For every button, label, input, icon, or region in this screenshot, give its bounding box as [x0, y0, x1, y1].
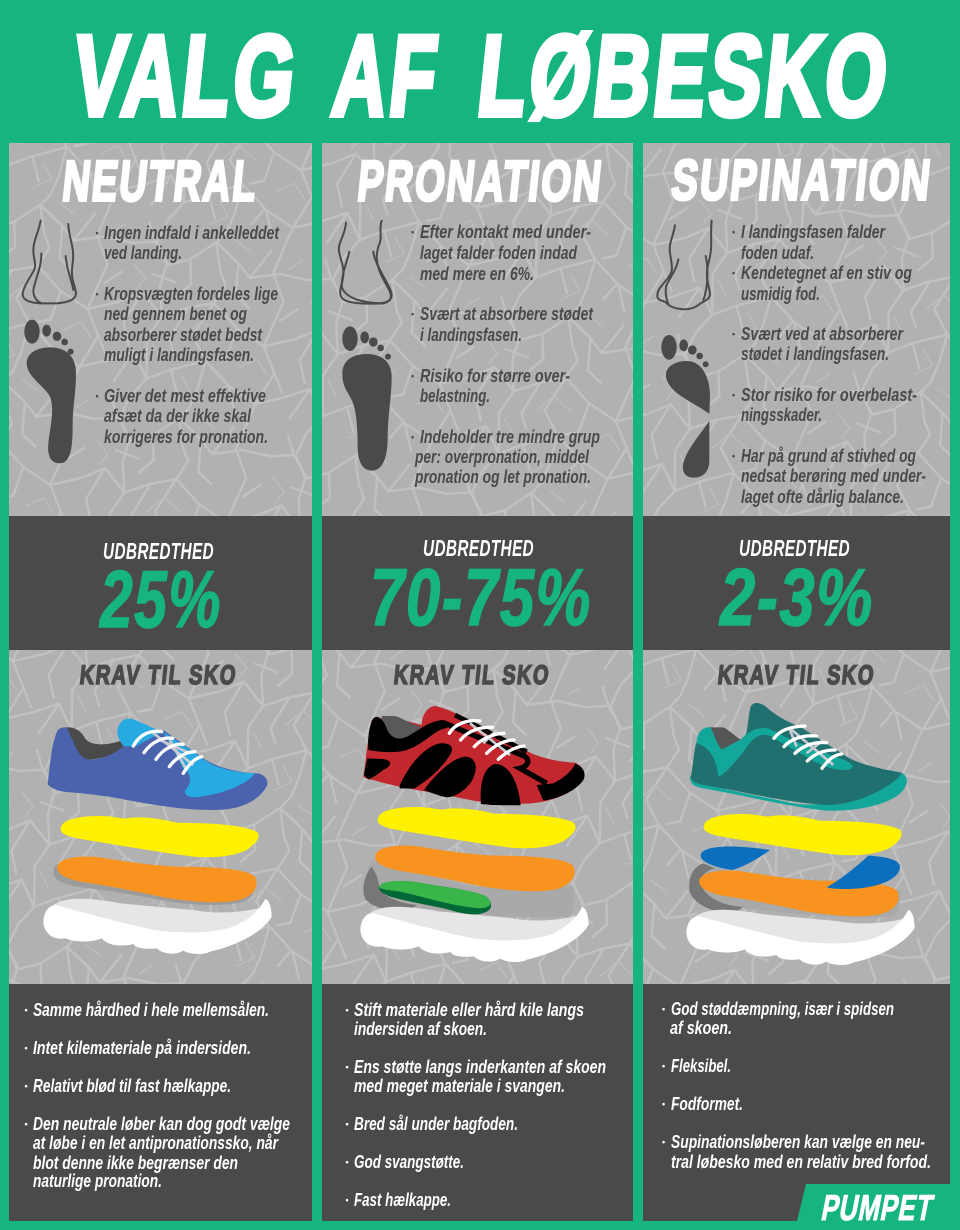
pronation insole layer: [378, 807, 576, 848]
supination description: •: [732, 329, 735, 339]
supination description: usmidig fod.: [741, 284, 820, 304]
pronation description: pronation og let pronation.: [414, 467, 591, 487]
title: AF: [327, 13, 446, 140]
neutral shoe heading: KRAV TIL SKO: [78, 659, 239, 690]
neutral description: afsæt da der ikke skal: [104, 406, 252, 426]
pronation shoe requirements: Stift materiale eller hård kile langs: [354, 1000, 584, 1020]
neutral shoe requirements: •: [24, 1081, 28, 1091]
neutral shoe panel background: [9, 650, 312, 984]
supination shoe requirements: Fodformet.: [671, 1094, 743, 1114]
pronation shoe requirements: •: [346, 1119, 349, 1129]
pronation shoe requirements: God svangstøtte.: [354, 1152, 464, 1172]
supination prevalence band: UDBREDTHED: [739, 535, 850, 561]
supination description: Kendetegnet af en stiv og: [741, 263, 912, 283]
supination description: •: [732, 390, 735, 400]
supination description: Stor risiko for overbelast-: [741, 385, 917, 405]
pronation description: belastning.: [420, 386, 490, 406]
neutral description: Kropsvægten fordeles lige: [104, 284, 278, 304]
icon: pronation footprint: [342, 326, 392, 471]
supination shoe requirements: •: [662, 1004, 665, 1014]
neutral shoe requirements: at løbe i en let antipronationssko, når: [33, 1133, 279, 1153]
supination description: I landingsfasen falder: [741, 222, 886, 242]
supination description: foden udaf.: [741, 243, 814, 263]
icon: supination footprint: [661, 335, 710, 478]
title: [67, 13, 897, 140]
pronation shoe requirements: Ens støtte langs inderkanten af skoen: [354, 1057, 606, 1077]
pronation heel and midsole base: [363, 860, 574, 917]
neutral description: korrigeres for pronation.: [104, 427, 268, 447]
pronation description: i landingsfasen.: [420, 325, 522, 345]
pronation top panel background: [322, 143, 633, 516]
icon: supination ankle: [657, 221, 712, 309]
pronation shoe requirements: med meget materiale i svangen.: [354, 1076, 565, 1096]
pronation description: •: [411, 227, 414, 237]
supination description: stødet i landingsfasen.: [741, 344, 889, 364]
panel: neutral: [9, 143, 312, 1221]
icon: pronation ankle: [339, 221, 392, 304]
pronation description: [411, 222, 600, 487]
neutral description: •: [96, 289, 99, 299]
pronation prevalence band: UDBREDTHED: [423, 535, 534, 561]
neutral sole layer: [43, 899, 272, 954]
neutral description: Giver det mest effektive: [104, 386, 266, 406]
supination shoe requirements: af skoen.: [670, 1018, 732, 1038]
supination description: •: [732, 227, 735, 237]
supination description: ningsskader.: [741, 405, 822, 425]
neutral description: absorberer stødet bedst: [104, 325, 263, 345]
neutral description: ned gennem benet og: [104, 304, 247, 324]
pronation description: Svært at absorbere stødet: [420, 304, 594, 324]
neutral shoe requirements: Den neutrale løber kan dog godt vælge: [33, 1114, 290, 1134]
pronation description: •: [411, 432, 414, 442]
supination description: [732, 222, 926, 507]
pronation description: laget falder foden indad: [420, 243, 578, 263]
supination heel and midsole base: [689, 863, 900, 917]
pronation description: per: overpronation, middel: [414, 447, 590, 467]
pronation red shoe: [363, 706, 585, 805]
pronation description: •: [411, 309, 414, 319]
neutral insole layer: [61, 816, 259, 857]
pronation shoe requirements: •: [346, 1005, 349, 1015]
pronation prevalence band: [322, 516, 633, 650]
supination sole layer: [686, 910, 915, 965]
pronation shoe requirements: •: [346, 1195, 349, 1205]
pronation shoe requirements: Bred sål under bagfoden.: [354, 1114, 518, 1134]
supination prevalence band: 2-3%: [718, 553, 874, 643]
neutral shoe requirements: •: [24, 1005, 28, 1015]
neutral prevalence band: 25%: [99, 555, 222, 645]
pronation shoe requirements: [322, 984, 633, 1221]
title: VALG: [67, 13, 305, 140]
supination shoe requirements: •: [662, 1061, 665, 1071]
neutral shoe requirements: •: [24, 1043, 28, 1053]
pronation description: Indeholder tre mindre grup: [420, 427, 600, 447]
supination description: •: [732, 268, 735, 278]
neutral description: muligt i landingsfasen.: [104, 345, 254, 365]
neutral shoe requirements: Samme hårdhed i hele mellemsålen.: [33, 1000, 269, 1020]
neutral heading: NEUTRAL: [60, 150, 261, 213]
pronation midsole layer: [375, 846, 575, 891]
neutral description: Ingen indfald i ankelleddet: [104, 223, 280, 243]
neutral shoe requirements: Relativt blød til fast hælkappe.: [33, 1076, 231, 1096]
neutral shoe requirements: [9, 984, 312, 1221]
supination top panel background: [643, 143, 950, 516]
panel: supination: [643, 143, 950, 1221]
neutral description: ved landing.: [104, 243, 182, 263]
supination shoe panel background: [643, 650, 950, 984]
neutral prevalence band: [9, 516, 312, 650]
pronation description: •: [411, 371, 414, 381]
supination description: laget ofte dårlig balance.: [741, 487, 904, 507]
pronation description: Efter kontakt med under-: [420, 222, 591, 242]
panel: pronation: [322, 143, 633, 1221]
supination shoe heading: KRAV TIL SKO: [716, 659, 877, 690]
supination insole layer: [704, 814, 902, 855]
neutral description: •: [96, 228, 99, 238]
neutral prevalence band: UDBREDTHED: [103, 538, 214, 564]
supination description: •: [732, 451, 735, 461]
supination blue cushioning wedges: [701, 846, 900, 889]
supination shoe requirements: Fleksibel.: [671, 1056, 731, 1076]
pronation description: med mere en 6%.: [420, 264, 534, 284]
neutral description: [96, 223, 280, 447]
pronation shoe requirements: indersiden af skoen.: [354, 1019, 487, 1039]
pronation green support wedge: [379, 881, 491, 914]
neutral shoe requirements: naturlige pronation.: [33, 1171, 162, 1191]
pronation shoe requirements: •: [346, 1157, 349, 1167]
neutral blue shoe: [48, 719, 267, 810]
neutral shoe requirements: •: [24, 1119, 28, 1129]
neutral midsole layer: [53, 857, 257, 905]
pronation shoe requirements: Fast hælkappe.: [354, 1190, 451, 1210]
icon: neutral footprint: [24, 320, 76, 463]
supination shoe requirements: •: [662, 1099, 665, 1109]
supination shoe requirements: •: [662, 1137, 665, 1147]
supination teal shoe: [690, 703, 907, 811]
pronation shoe panel background: [322, 650, 633, 984]
icon: neutral ankle: [23, 221, 76, 303]
pronation description: Risiko for større over-: [420, 366, 570, 386]
supination prevalence band: [643, 516, 950, 650]
neutral shoe requirements: blot denne ikke begrænser den: [33, 1153, 238, 1173]
pronation shoe requirements: •: [346, 1062, 349, 1072]
neutral shoe requirements: Intet kilemateriale på indersiden.: [33, 1038, 251, 1058]
pronation sole layer: [360, 907, 589, 962]
neutral description: •: [96, 391, 99, 401]
neutral top panel background: [9, 143, 312, 516]
supination shoe requirements: [643, 984, 950, 1221]
pronation heading: PRONATION: [355, 150, 606, 213]
supination midsole layer: [699, 871, 899, 916]
pronation prevalence band: 70-75%: [370, 553, 592, 643]
pronation shoe heading: KRAV TIL SKO: [392, 659, 552, 690]
supination description: Svært ved at absorberer: [741, 324, 904, 344]
